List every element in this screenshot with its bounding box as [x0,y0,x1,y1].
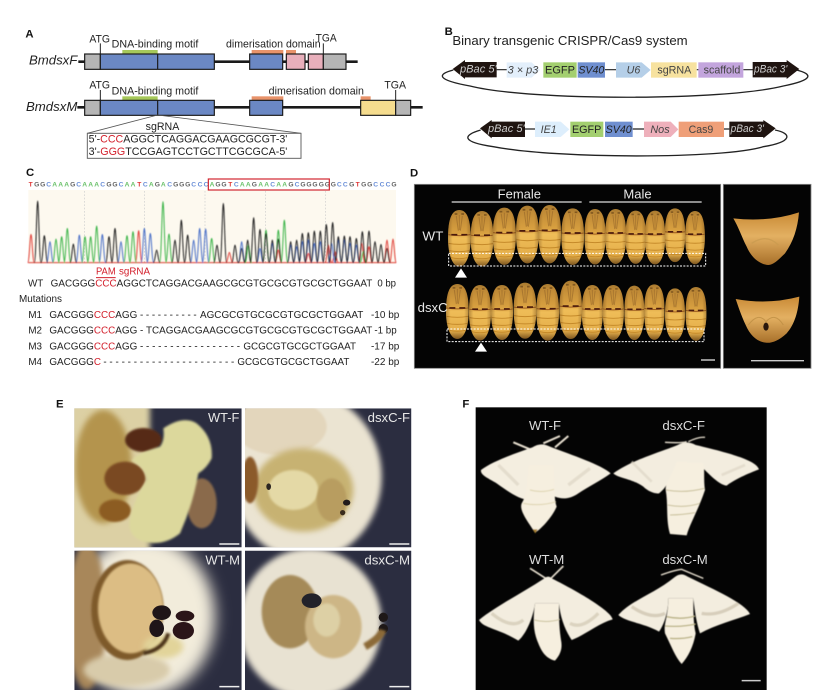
mutation M4: GCGCGTGCGCTGGAAT [237,357,349,368]
panel C: sequencing [19,167,400,368]
moth WT-M [479,566,613,661]
pupae photograph [414,184,721,368]
panel D: pupae [410,168,811,368]
moth labels: dsxC-F [662,419,705,433]
Male group label: Male [623,187,652,202]
mutation M1: GACGGGCCCAGG [49,310,137,321]
arrowhead dsxC [475,343,487,352]
BmdsxM gene model: TGA [384,79,407,91]
BmdsxF gene model: dimerisation domain [226,39,321,51]
panel B: CRISPR/Cas9 constructs [442,26,808,156]
photo WT-M: WT-M [205,553,240,567]
chromatogram [28,190,396,264]
moth labels: WT-M [529,553,564,567]
photo WT-M [74,550,242,690]
mutation M3: -17 bp [371,341,400,352]
mutation M1: -10 bp [371,310,400,321]
sgRNA construct: 3 × p3 [508,65,538,77]
mutation M3: GACGGGCCCAGG [49,341,137,352]
mutation M2: TCAGGACGAAGCGCGTGCGCGTGCGCTGGAAT [146,325,372,336]
panel B title: Binary transgenic CRISPR/Cas9 system [452,33,688,48]
mutations heading: Mutations [19,294,62,305]
moth labels: WT-F [529,419,561,433]
sgRNA callout: sgRNA [146,121,180,133]
sgRNA construct: pBac 3' [753,64,788,76]
Cas9 construct: pBac 5' [487,123,526,135]
mutation M1 [28,310,400,321]
wild-type sequence: WT [28,278,43,289]
Cas9 construct: Cas9 [689,124,713,136]
moth labels [529,419,708,567]
Cas9 construct: EGFP [572,124,601,136]
mutation M1: M1 [28,310,42,321]
sgRNA callout: 3'-GGGTCCGAGTCCTGCTTCGCGCA-5' [89,146,287,158]
mutation M2 [28,325,397,336]
mutation M3: GCGCGTGCGCTGGAAT [243,341,356,352]
panel E: genital close-ups [56,393,411,698]
wild-type sequence: 0 bp [377,278,397,289]
Female group label: Female [498,187,541,202]
scale bar [742,678,761,683]
Female group label [452,187,582,202]
mutation M3 [28,341,400,352]
moth dsxC-F [613,437,759,535]
moth labels: dsxC-M [662,553,708,567]
photo dsxC-F: dsxC-F [368,411,410,425]
dsxC row label: dsxC [418,300,448,315]
sgRNA construct: EGFP [545,65,575,77]
scale bar [701,358,715,362]
mutation M3: M3 [28,341,43,352]
BmdsxF gene model: TGA [316,33,338,45]
moth WT-F [481,436,611,533]
terminal abdomen photograph [723,184,811,368]
mutation M4: - - - - - - - - - - - - - - - - - - - - - - [103,357,234,368]
mutation M4: GACGGGC [49,357,101,368]
mutation M2: -1 bp [374,325,397,336]
panel letter C: C [26,167,34,179]
sgRNA construct [442,60,808,97]
Cas9 construct [468,120,787,156]
wild-type sequence: GACGGGCCCAGGCTCAGGACGAAGCGCGTGCGCGTGCGCTGGAAT [51,278,372,289]
sgRNA construct: pBac 5' [459,64,498,76]
BmdsxM gene model [26,79,423,115]
BmdsxF gene model [29,33,358,69]
panel letter A: A [25,29,34,41]
Cas9 construct: Nos [650,124,670,136]
highlighted sgRNA box [208,179,329,190]
mutation M2: M2 [28,325,42,336]
photo dsxC-M: dsxC-M [364,553,410,567]
BmdsxF gene model: ATG [89,33,110,45]
mutation M2: - [140,325,143,336]
mutation M4: M4 [28,357,43,368]
sgRNA construct: sgRNA [657,65,692,77]
panel letter B: B [445,26,453,38]
black photo background [476,407,767,690]
photo WT-F: WT-F [208,411,240,425]
Male group label [589,187,702,202]
photo dsxC-F [245,408,412,548]
mutation M4 [28,357,400,368]
BmdsxF gene model: DNA-binding motif [112,39,198,51]
sgRNA construct: U6 [627,65,640,77]
mutation M1: AGCGCGTGCGCGTGCGCTGGAAT [200,310,363,321]
PAM and sgRNA labels: sgRNA [119,267,150,278]
panel letter E: E [56,398,64,410]
BmdsxM gene model: BmdsxM [26,99,77,114]
BmdsxM gene model: DNA-binding motif [112,85,198,97]
Cas9 construct: pBac 3' [730,123,765,135]
mutation M4: -22 bp [371,357,400,368]
mutation M3: - - - - - - - - - - - - - - - - - [140,341,240,352]
base call row: TGGCAAAGCAAACGGCAATCAGACGGGCCCAGGTCAAGAACAAGCGGGGGGCCGTGGCCCG [29,182,397,189]
moth dsxC-M [618,569,750,664]
WT row label: WT [422,229,443,244]
Cas9 construct: IE1 [541,124,557,136]
panel letter F: F [462,398,469,410]
panel letter D: D [410,168,418,180]
mutation M1: - - - - - - - - - - [140,310,197,321]
photo WT-F [74,408,242,548]
Cas9 construct: SV40 [606,124,632,136]
panel A: gene structure [25,29,423,158]
BmdsxM gene model: ATG [89,79,110,91]
sgRNA construct: SV40 [578,65,604,77]
arrowhead WT [455,268,467,278]
PAM and sgRNA labels: PAM [96,267,116,278]
photo dsxC-M [245,550,412,690]
mutation M2: GACGGGCCCAGG [49,325,137,336]
dashed selection boxes [447,253,706,342]
sgRNA callout: 5'-CCCAGGCTCAGGACGAAGCGCGT-3' [89,133,287,145]
BmdsxF gene model: BmdsxF [29,52,78,67]
sgRNA callout [87,115,301,158]
panel F: adult moths [462,398,767,690]
sgRNA construct: scaffold [704,65,740,77]
PAM and sgRNA labels [96,267,150,278]
BmdsxM gene model: dimerisation domain [269,85,364,97]
